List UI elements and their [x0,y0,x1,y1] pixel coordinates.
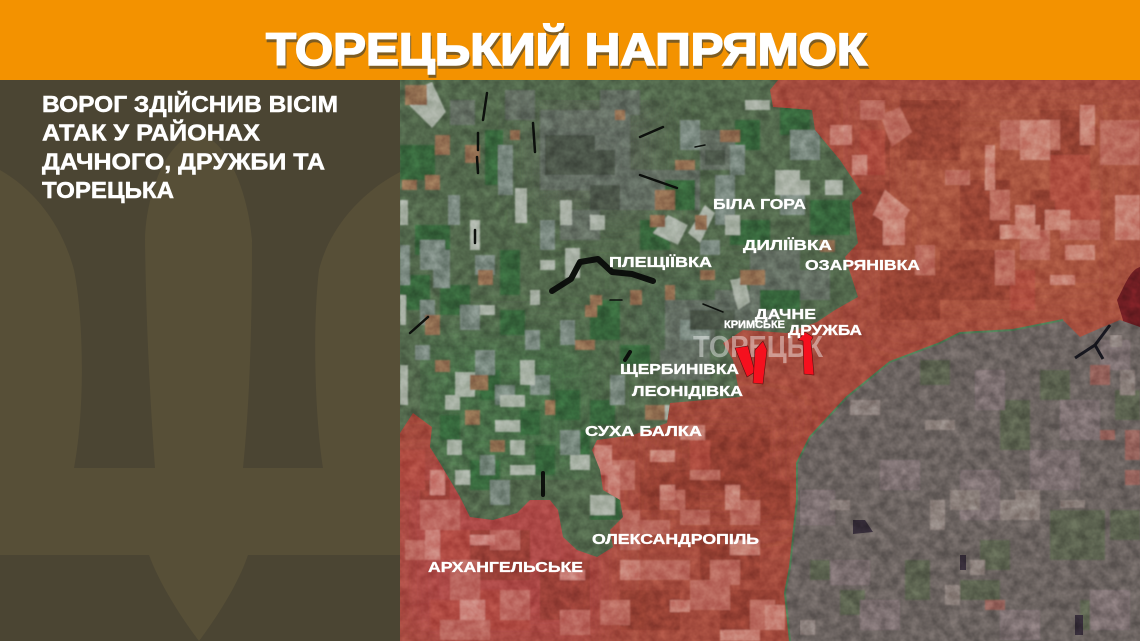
text block: summary: АТАК У РАЙОНАХ [42,118,261,146]
label: Arkhanhelske: АРХАНГЕЛЬСЬКЕ [428,559,583,576]
panel: left text panel [0,80,400,641]
map labels [428,196,920,576]
text block: summary: ДАЧНОГО, ДРУЖБИ ТА [42,148,325,174]
label: Leonidivka: ЛЕОНІДІВКА [632,383,743,400]
text block: summary [42,90,338,203]
label: Shcherbynivka: ЩЕРБИНІВКА [620,361,739,378]
header bar [0,0,1140,80]
label: Pleshchiivka: ПЛЕЩІЇВКА [609,254,712,271]
text block: summary: ВОРОГ ЗДІЙСНИВ ВІСІМ [42,90,338,117]
map region: grey city area [780,310,1140,641]
label: Druzhba: ДРУЖБА [788,322,862,339]
arrow: attack 3 [798,332,814,375]
title: ТОРЕЦЬКИЙ НАПРЯМОК [266,24,868,75]
label: Dachne: ДАЧНЕ [755,306,816,323]
label: Sukha Balka: СУХА БАЛКА [585,423,702,440]
arrow: attack 1 [735,346,755,377]
label: Krymske: КРИМСЬКЕ [724,319,785,331]
label: city: ТОРЕЦЬК [693,329,823,364]
label: Ozarianivka: ОЗАРЯНІВКА [805,257,920,274]
text block: summary: ТОРЕЦЬКА [42,177,174,203]
arrow: attack 2 [753,341,767,384]
map region: red occupied area [400,80,1140,641]
icon: trident watermark [0,135,400,641]
map feature: rivers and reservoir [410,93,723,495]
map feature: dark reservoir [1117,267,1140,327]
label: Dyliivka: ДИЛІЇВКА [743,237,832,254]
map region: green unoccupied area [400,80,870,560]
label: Oleksandropil: ОЛЕКСАНДРОПІЛЬ [592,531,759,548]
map texture overlay [400,80,1140,641]
map: satellite map [400,80,1140,641]
label: Bila Hora: БІЛА ГОРА [713,196,806,213]
